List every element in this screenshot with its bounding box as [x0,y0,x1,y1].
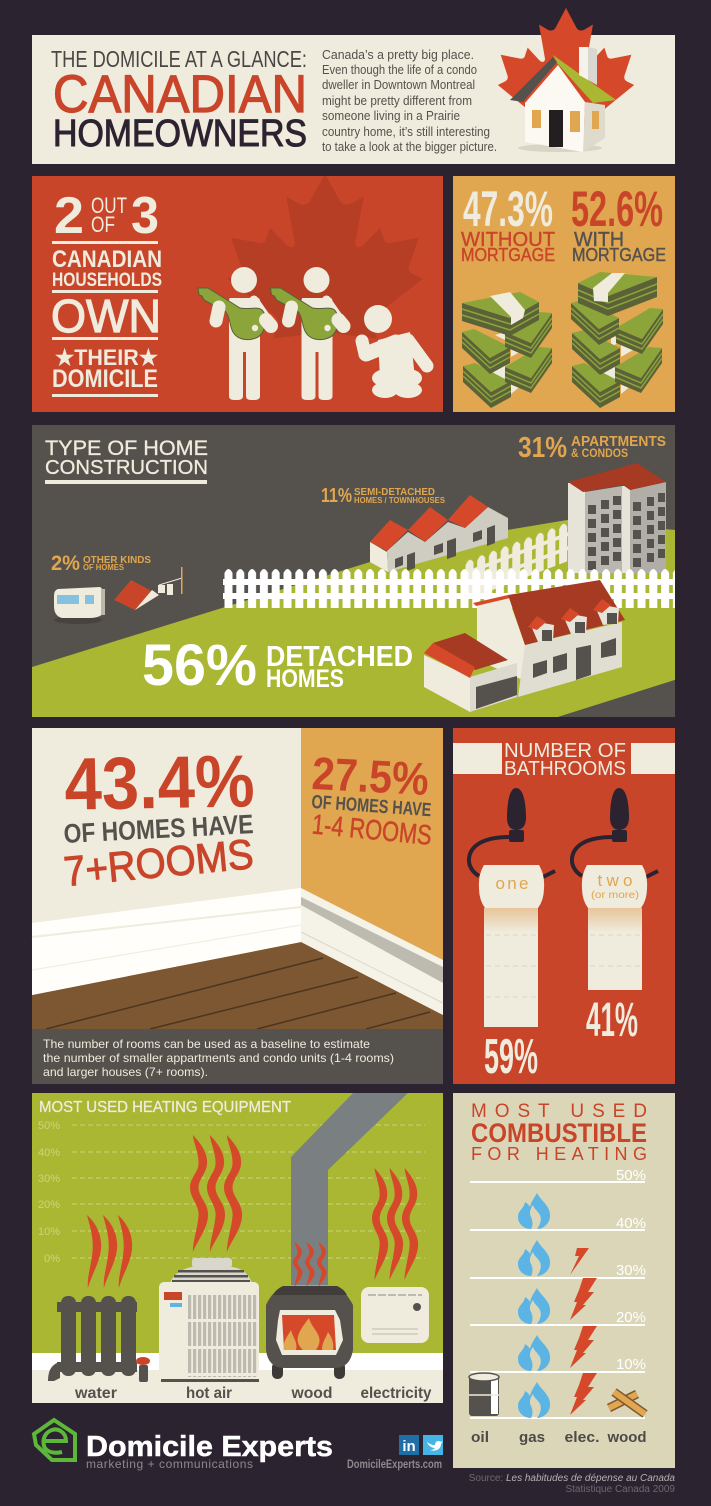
note band: the number of smaller appartments and condo units (1-4 rooms) [43,1051,394,1065]
intro paragraph: to take a look at the bigger picture. [322,140,497,154]
toilet roll: two or more: 41% [586,994,638,1047]
axis and grid: 0% [44,1253,60,1265]
back fence [464,521,568,601]
baseboard left [32,888,301,995]
stat: 2% other: OF HOMES [83,563,125,572]
stat: 56% detached homes: HOMES [266,665,344,693]
stat: 2 out of 3: 3 [131,187,159,245]
intro paragraph: someone living in a Prairie [322,109,460,123]
dormer windows [528,599,619,642]
icon: air conditioner [159,1258,259,1382]
stat: 31% apartments: APARTMENTS [571,433,666,450]
icon: person with key [198,267,272,400]
stat: 2 out of 3: 2 [54,187,84,245]
note band: and larger houses (7+ rooms). [43,1065,208,1079]
stat: 52.6% with mortgage [571,181,666,265]
icon: kneeling person [362,305,427,398]
combustible labels [471,1429,646,1446]
toilet roll: two or more: (or more) [591,890,639,901]
axis and grid [38,1120,425,1265]
stat: 47.3% without mortgage: WITHOUT [461,229,555,251]
stat: 43.4% of homes have 7+ rooms [62,739,255,895]
scale lines: 50% [616,1167,646,1184]
note band [32,1029,443,1084]
panel: most used combustible [453,1093,675,1468]
icon: apartment building [568,463,666,573]
panel: rooms [32,728,443,1084]
icon: house on maple leaf [498,8,634,152]
text: Canadian households own their domicile [51,241,162,397]
source credit: Source: Les habitudes de dépense au Canada [469,1473,675,1484]
stat: 52.6% with mortgage: 52.6% [571,181,663,237]
icon: radiator [48,1296,150,1382]
toilet roll: two or more: two [598,871,632,890]
axis and grid: 10% [38,1226,60,1238]
stat: 2 out of 3: OF [91,212,115,237]
stat: 2% other: 2% [51,552,80,575]
front picket fence [223,568,675,608]
text: Canadian households own their domicile: CANADIAN [52,246,162,273]
stat: 11% semi-detached: SEMI-DETACHED [354,486,435,498]
equipment labels: wood [291,1385,332,1402]
tagline: marketing + communications [86,1457,253,1471]
dark road corner [558,680,675,717]
title: the domicile at a glance: THE DOMICILE AT A GLANCE: [51,46,307,72]
scale lines: 10% [616,1356,646,1373]
axis and grid: 20% [38,1199,60,1211]
maple leaf background [228,176,422,338]
stat: 47.3% without mortgage: MORTGAGE [461,245,555,265]
text: Canadian households own their domicile: DOMICILE [52,365,158,393]
panel: header [32,8,675,164]
intro paragraph: dweller in Downtown Montreal [322,78,475,92]
icon: oil barrel [469,1373,499,1416]
text: Canadian households own their domicile: OWN [51,290,161,342]
stat: 52.6% with mortgage: WITH [574,229,624,251]
social icons [347,1435,443,1471]
heading [453,740,675,780]
axis and grid: 50% [38,1120,60,1132]
equipment labels: water [74,1385,117,1402]
stat: 11% semi-detached [321,485,445,507]
toilet roll: two or more [572,788,658,1047]
stat: 47.3% without mortgage [461,181,555,265]
heading: NUMBER OF [504,740,626,762]
toilet roll: one: 59% [484,1030,538,1084]
floor [32,1353,443,1370]
heading [471,1101,647,1164]
combustible labels: elec. [564,1429,600,1446]
combustible labels: oil [471,1429,489,1446]
equipment labels: hot air [186,1385,232,1402]
heat waves: electricity [372,1168,418,1280]
combustible labels: wood [607,1429,646,1446]
heat waves: water [87,1215,132,1288]
icon: detached house [424,580,625,712]
icon: wood planks [609,1392,645,1414]
intro paragraph: country home, it’s still interesting [322,125,490,139]
stat: 27.5% of homes have 1-4 rooms [311,747,433,851]
stat: 56% detached homes: DETACHED [266,641,413,673]
axis and grid: 30% [38,1173,60,1185]
website: DomicileExperts.com [347,1457,442,1471]
panel: most used heating equipment [32,1093,443,1403]
stat: 31% apartments: & CONDOS [571,446,628,460]
heat waves: wood [293,1242,326,1287]
heading: FOR HEATING [471,1144,647,1164]
source credit: Statistique Canada 2009 [565,1484,675,1495]
stat: 31% apartments [518,432,666,464]
heading: TYPE OF HOME [45,437,208,460]
scale lines: 30% [616,1262,646,1279]
floor [32,942,443,1029]
stat: 27.5% of homes have 1-4 rooms: OF HOMES HAVE [311,792,432,821]
gas flames [518,1193,550,1418]
panel: 2 out of 3 households [32,174,443,412]
panel: mortgage [453,176,675,412]
panel: type of home construction [32,425,675,717]
stat: 47.3% without mortgage: 47.3% [463,181,553,237]
icon: linkedin: in [402,1438,416,1455]
equipment labels: electricity [360,1385,432,1402]
combustible labels: gas [519,1429,545,1446]
intro paragraph [322,48,497,154]
source credit [469,1473,675,1495]
title: Homeowners: HOMEOWNERS [53,113,307,155]
icon: second person with key [270,267,344,400]
heading: MOST USED [471,1101,647,1122]
intro paragraph: Canada’s a pretty big place. [322,48,474,62]
stat: 52.6% with mortgage: MORTGAGE [572,245,666,265]
intro paragraph: might be pretty different from [322,94,472,108]
heading: BATHROOMS [504,758,626,780]
stat: 31% apartments: 31% [518,432,567,464]
baseboard right [301,888,443,1015]
heat waves: hot air [190,1135,242,1252]
scale lines: 20% [616,1309,646,1326]
icon: electric heater [361,1287,429,1343]
toilet roll: one: one [496,874,528,893]
heading: COMBUSTIBLE [471,1118,647,1148]
text: Canadian households own their domicile: ★THEIR★ [55,345,158,370]
panel: number of bathrooms [453,728,675,1084]
logo: Domicile Experts [34,1420,333,1471]
heading: MOST USED HEATING EQUIPMENT [39,1099,291,1116]
stat: 56% detached homes: 56% [142,633,257,698]
intro paragraph: Even though the life of a condo [322,63,477,77]
scale lines: 40% [616,1215,646,1232]
icon: twitter [423,1435,443,1455]
electricity bolts [570,1248,597,1415]
equipment labels [74,1385,432,1402]
icon: wood stove [266,1286,353,1379]
logo mark [34,1420,75,1460]
heading: CONSTRUCTION [45,457,208,479]
stat: 43.4% of homes have 7+ rooms: 43.4% [64,739,255,826]
icon: money stack right [571,272,663,408]
title: Canadian: CANADIAN [53,65,307,124]
toilet roll: one [469,788,555,1084]
icon: semi-detached houses [370,495,508,572]
scale lines [470,1167,646,1419]
icon: tent and clothesline [114,567,182,610]
stat: 11% semi-detached: 11% [321,485,352,507]
green ground [32,520,675,717]
heading [45,437,208,484]
stat: 43.4% of homes have 7+ rooms: 7+ROOMS [62,830,255,895]
text: Canadian households own their domicile: HOUSEHOLDS [52,270,162,291]
icon: caravan [54,587,105,624]
stat: 56% detached homes [142,633,413,698]
stat: 43.4% of homes have 7+ rooms: OF HOMES HAVE [63,809,254,849]
stat: 27.5% of homes have 1-4 rooms: 27.5% [311,747,430,805]
stat: 2 out of 3 [54,187,159,245]
note band: The number of rooms can be used as a baseline to estimate [43,1037,370,1051]
stat: 27.5% of homes have 1-4 rooms: 1-4 ROOMS [311,808,433,851]
stat: 2% other: OTHER KINDS [83,554,151,566]
stat: 2 out of 3: OUT [91,193,127,218]
icon: money stack left [462,292,552,408]
company name: Domicile Experts [86,1431,333,1463]
stat: 2% other [51,552,151,575]
stove pipe [291,1093,408,1285]
axis and grid: 40% [38,1147,60,1159]
stat: 11% semi-detached: HOMES / TOWNHOUSES [354,495,445,505]
